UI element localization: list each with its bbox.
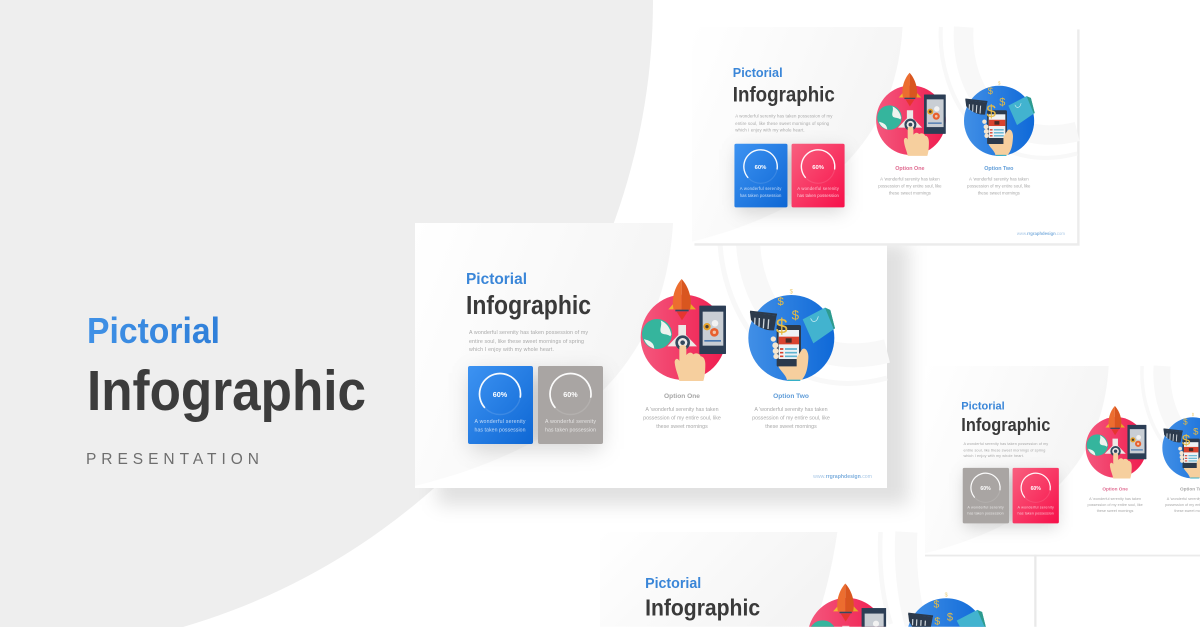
icon: rocket and phone bbox=[641, 279, 726, 381]
slide paragraph: A wonderful serenity has taken possession of my bbox=[963, 442, 1048, 446]
heading: Infographic: Infographic bbox=[87, 359, 366, 423]
card: blue 60%: has taken possession bbox=[740, 193, 782, 198]
option two text: possession of my entire soul, like bbox=[752, 416, 830, 422]
option one text: possession of my entire soul, like bbox=[878, 183, 942, 188]
option one text: these sweet mornings bbox=[1097, 509, 1134, 513]
card: pink 60%: has taken possession bbox=[797, 193, 840, 198]
icon: shopping phone bbox=[748, 289, 835, 381]
slide heading bbox=[733, 65, 835, 106]
option one text bbox=[878, 166, 942, 195]
option two text: possession of my entire soul, like bbox=[967, 183, 1031, 188]
slide heading: Infographic bbox=[466, 292, 591, 320]
card: blue 60%: A wonderful serenity bbox=[740, 186, 782, 191]
option one text: A 'wonderful serenity has taken bbox=[880, 176, 940, 181]
slide paragraph bbox=[735, 114, 833, 132]
card: blue 60% bbox=[468, 366, 533, 444]
card: blue 60%: A wonderful serenity bbox=[474, 419, 526, 425]
icon: shopping phone: $ bbox=[947, 612, 953, 624]
icon: shopping phone bbox=[964, 80, 1035, 156]
card: pink 60%: 60% bbox=[1031, 486, 1041, 492]
slide background bbox=[600, 532, 1034, 627]
slide heading bbox=[961, 400, 1050, 435]
card: grey 60%: 60% bbox=[563, 390, 578, 399]
option two text bbox=[967, 166, 1031, 195]
slide paragraph: A wonderful serenity has taken possession of my bbox=[469, 330, 588, 336]
slide bottom edge bbox=[925, 555, 1200, 556]
card: blue 60%: has taken possession bbox=[474, 428, 526, 434]
option one text: these sweet mornings bbox=[889, 190, 931, 195]
card: grey 60%: A wonderful serenity bbox=[545, 419, 596, 425]
card shadow bbox=[471, 373, 601, 449]
option one text: A 'wonderful serenity has taken bbox=[645, 407, 719, 413]
card: blue 60%: 60% bbox=[493, 390, 508, 399]
option one text bbox=[1087, 487, 1143, 513]
slide paragraph: which I enjoy with my whole heart. bbox=[963, 454, 1024, 458]
option one text: A 'wonderful serenity has taken bbox=[1089, 497, 1141, 501]
card: blue 60%: 60% bbox=[755, 165, 767, 171]
option two text: Option Two bbox=[984, 166, 1014, 172]
slide right edge bbox=[1034, 532, 1037, 627]
slide paragraph: which I enjoy with my whole heart. bbox=[469, 347, 554, 353]
icon: rocket and phone bbox=[1086, 406, 1146, 478]
card: grey 60%: has taken possession bbox=[545, 428, 596, 434]
icon: rocket and phone bbox=[876, 73, 946, 156]
card: grey 60%: has taken possession bbox=[967, 511, 1004, 515]
main title block bbox=[86, 310, 366, 468]
slide heading: Infographic bbox=[961, 415, 1050, 435]
option two text: Option Two bbox=[773, 393, 809, 400]
card: pink 60%: A wonderful serenity bbox=[797, 186, 840, 191]
slide heading bbox=[645, 576, 760, 621]
option one text: Option One bbox=[664, 393, 700, 400]
card: grey 60%: A wonderful serenity bbox=[967, 505, 1004, 509]
website url: www.rrgraphdesign.com bbox=[1017, 231, 1065, 236]
card: grey 60% bbox=[963, 468, 1009, 523]
slide background bbox=[925, 366, 1200, 555]
option two text bbox=[1165, 487, 1200, 513]
icon: shopping phone: $ bbox=[934, 599, 940, 610]
slide edge shadow bbox=[694, 29, 1080, 246]
card: grey 60%: 60% bbox=[980, 486, 991, 492]
card: pink 60% bbox=[792, 144, 845, 207]
slide heading: Pictorial bbox=[961, 400, 1005, 412]
option one text: Option One bbox=[1102, 487, 1128, 492]
option one text bbox=[643, 393, 721, 430]
icon: rocket and phone bbox=[809, 584, 886, 627]
card: blue 60% bbox=[734, 144, 787, 207]
large grey quarter circle bbox=[0, 0, 653, 627]
slide background bbox=[692, 27, 1077, 243]
slide paragraph bbox=[963, 442, 1048, 458]
slide heading: Pictorial bbox=[645, 576, 701, 592]
card: pink 60%: 60% bbox=[812, 165, 825, 171]
slide paragraph: entire soul, like these sweet mornings of spring bbox=[469, 339, 584, 345]
option two text: A 'wonderful serenity has taken bbox=[969, 176, 1029, 181]
slide heading: Infographic bbox=[645, 595, 760, 621]
card: pink 60% bbox=[1013, 468, 1059, 523]
slide preview: main bbox=[415, 223, 909, 505]
slide paragraph bbox=[469, 330, 588, 353]
option one text: Option One bbox=[895, 166, 925, 172]
card: pink 60%: A wonderful serenity bbox=[1018, 505, 1054, 509]
option two text bbox=[752, 393, 830, 430]
slide heading bbox=[466, 271, 591, 320]
website url: www.rrgraphdesign.com bbox=[813, 474, 872, 480]
option one text: possession of my entire soul, like bbox=[1087, 503, 1143, 507]
slide heading: Pictorial bbox=[733, 65, 783, 80]
option one text: possession of my entire soul, like bbox=[643, 416, 721, 422]
icon: shopping phone bbox=[908, 593, 986, 627]
slide preview: right bbox=[925, 366, 1200, 556]
slide preview: bottom bbox=[600, 532, 1037, 627]
slide heading: Pictorial bbox=[466, 271, 527, 288]
card shadow bbox=[738, 149, 844, 211]
option two text: these sweet mornings bbox=[765, 424, 817, 430]
icon: shopping phone: $ bbox=[945, 593, 948, 599]
icon: shopping phone bbox=[1162, 412, 1200, 478]
slide paragraph: A wonderful serenity has taken possession of my bbox=[735, 114, 833, 119]
slide paragraph: entire soul, like these sweet mornings of spring bbox=[735, 121, 830, 126]
slide preview: top bbox=[692, 27, 1080, 246]
option two text: these sweet mornings bbox=[978, 190, 1020, 195]
slide shadow bbox=[437, 243, 909, 505]
slide paragraph: entire soul, like these sweet mornings of spring bbox=[963, 448, 1045, 452]
card: pink 60%: has taken possession bbox=[1018, 511, 1054, 515]
slide paragraph: which I enjoy with my whole heart. bbox=[735, 127, 805, 132]
card: grey 60% bbox=[538, 366, 603, 444]
slide background bbox=[415, 223, 887, 488]
heading: Pictorial: Pictorial bbox=[87, 310, 220, 351]
option two text: A 'wonderful serenity has taken bbox=[754, 407, 828, 413]
option one text: these sweet mornings bbox=[656, 424, 708, 430]
subtitle: Presentation: PRESENTATION bbox=[86, 451, 259, 468]
slide heading: Infographic bbox=[733, 83, 835, 106]
card shadow bbox=[965, 473, 1057, 527]
